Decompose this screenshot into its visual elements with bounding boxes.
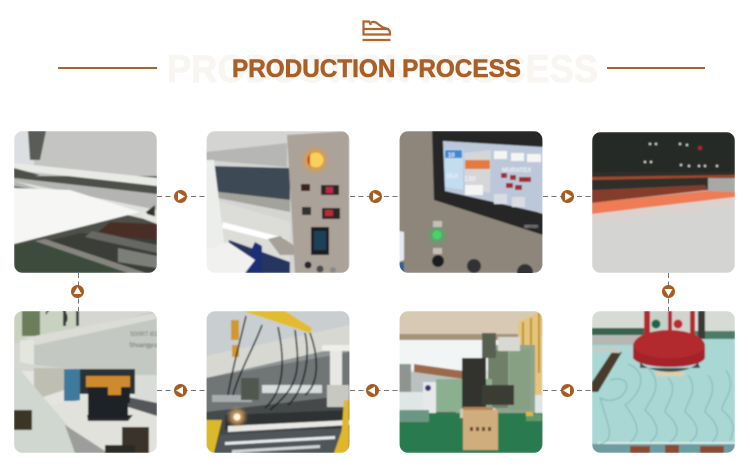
photo: touch screen panel: 130: [464, 176, 476, 183]
photo: control panel with orange lamp: [206, 131, 350, 273]
arrow: step 5 to 6: [561, 384, 574, 397]
photo: machine with black and orange block: Shuangyuan T: [129, 343, 168, 349]
arrow: step 8 to 1: [71, 285, 84, 298]
title: PRODUCTION PROCESS: [232, 55, 521, 83]
arrow: step 7 to 8: [174, 384, 187, 397]
heading rule: right: [607, 67, 705, 69]
arrow: step 6 to 7: [366, 384, 379, 397]
photo: machine with black and orange block: [14, 307, 168, 453]
photo: film extrusion line: [206, 311, 352, 453]
arrow: step 2 to 3: [369, 190, 382, 203]
arrow: step 1 to 2: [174, 190, 187, 203]
photo: factory machine and carton: [399, 311, 543, 453]
heading rule: left: [58, 67, 157, 69]
photo: touch screen panel: omron: [524, 224, 538, 230]
photo: touch screen panel: [399, 131, 543, 280]
photo: laminating roll with white sheet: [14, 131, 157, 273]
arrow: step 4 to 5: [662, 285, 675, 298]
photo: touch screen panel: 15.0: [446, 174, 458, 180]
photo: engraved teal sheet under red head: [592, 311, 735, 453]
photo: heating unit with orange glow: [592, 132, 735, 273]
ghost heading: PRODUCTION PROCESS: [167, 48, 598, 91]
photo: machine with black and orange block: S00RT-B11: [130, 332, 161, 338]
arrow: step 3 to 4: [561, 190, 574, 203]
photo: touch screen panel: 10: [448, 153, 455, 159]
photo: touch screen panel: MURATEX: [502, 168, 531, 174]
connector dashes: [78, 196, 668, 390]
icon: shoe: [362, 22, 390, 40]
